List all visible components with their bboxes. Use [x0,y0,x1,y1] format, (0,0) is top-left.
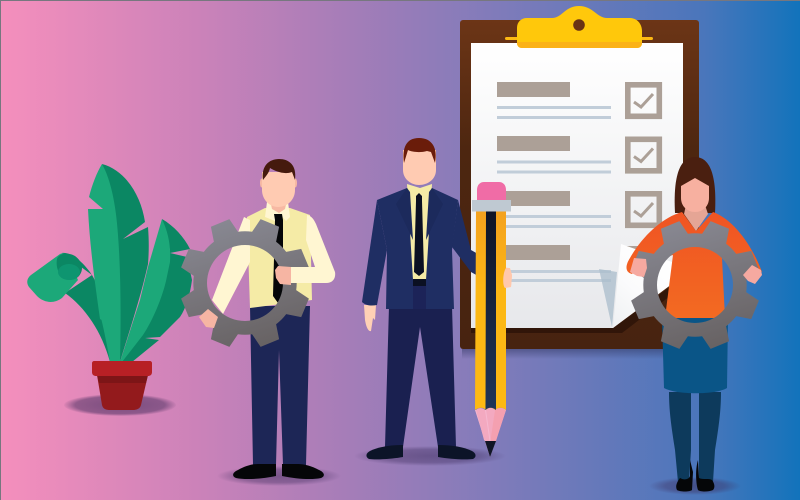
pencil stripe [486,211,496,410]
belt [413,279,426,286]
left shoe [676,460,693,492]
paper sheet [471,43,683,328]
hair [675,157,715,213]
fingers [503,268,512,288]
clipboard board [460,20,699,349]
gear [631,221,759,349]
pencil lead [485,441,496,457]
checklist row 3 [497,191,659,228]
plant shadow [64,394,176,416]
pencil eraser [477,182,506,200]
clip lower band [517,42,642,48]
left arm [362,200,387,306]
folded corner shadow [471,284,674,333]
face [403,150,436,185]
waist [413,286,426,309]
checklist row 2 [497,136,659,174]
hand right [275,266,291,285]
hand right [743,265,762,284]
tie [273,214,283,303]
leaf: centre light half [88,164,121,362]
ear left [260,178,263,188]
pot band [97,375,148,383]
right shoe [282,464,324,479]
pencil body [475,211,506,410]
vest [247,208,312,308]
left arm [212,217,250,314]
clip tabs [505,37,653,40]
shadow [649,477,741,495]
clipboard [460,6,699,359]
collar [265,202,290,221]
gear [181,219,309,347]
hand left [630,258,647,277]
face [262,172,295,207]
shirt [407,184,432,280]
skirt [662,318,728,393]
pot body [97,375,148,410]
leaf: curled left stem [62,253,120,362]
right arm [290,215,335,283]
hair [263,159,295,180]
left shoe [366,445,403,459]
clipboard shadow [462,349,698,359]
checklist row 1 [497,82,659,119]
neck [270,200,287,213]
clip hole [573,19,585,31]
pencil tip scallops [476,408,495,444]
shadow [217,466,341,486]
neck [684,205,708,231]
leaf: right light half [120,219,170,362]
leaf: curl highlight [58,264,80,280]
man holding gear [181,159,341,486]
right lapel [426,188,443,240]
right shoe [438,445,476,459]
shadow [354,446,506,466]
right forearm [452,200,478,276]
clip [517,6,642,48]
left leg [669,392,691,482]
right shoe [696,460,714,492]
pencil tip right [490,408,506,444]
left hand [364,305,376,331]
left lapel [396,188,413,240]
leaf: centre dark half [102,164,149,362]
leaf: right dark half [122,219,192,362]
checklist row 4 [497,245,662,283]
blouse [626,212,762,318]
trousers [250,306,310,465]
pencil tip wood [475,410,506,457]
ear right [294,178,297,188]
plant [27,164,192,416]
pot rim [92,361,152,376]
leaf: curled left [27,253,78,302]
pencil ferrule [472,200,511,212]
tie [414,193,424,276]
left shoe [233,464,276,479]
leaf: curl inner [57,254,82,280]
trousers [385,306,456,447]
man in suit [354,138,512,466]
pencil [472,182,511,457]
hair [404,138,436,163]
right leg [699,392,721,482]
folded corner fold shade [599,269,617,327]
face [681,178,709,212]
right hand behind pencil [500,267,512,288]
jacket [377,188,458,309]
folded paper flap [613,244,672,328]
hand left [199,309,218,328]
woman holding gear [626,157,762,495]
